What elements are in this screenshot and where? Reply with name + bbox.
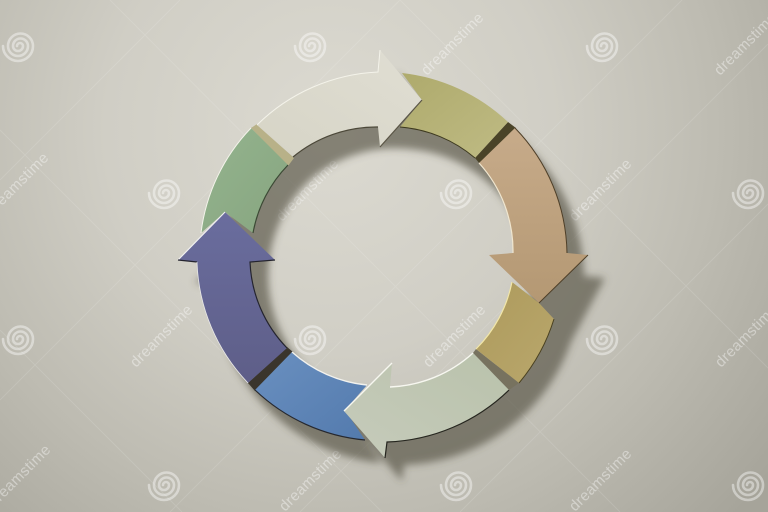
watermark text: dreamstime: [418, 9, 487, 79]
watermark text: dreamstime: [566, 155, 635, 225]
watermark text: dreamstime: [420, 301, 489, 371]
gaps between segments: [248, 122, 519, 391]
watermark text: dreamstime: [273, 155, 342, 225]
cast shadow of the ring: [195, 73, 605, 481]
arrow: purple: [178, 212, 287, 383]
segment: green: [201, 128, 288, 233]
arrow: white: [257, 50, 422, 157]
arrow: tan: [479, 128, 588, 303]
watermark text: dreamstime: [127, 301, 196, 371]
segment: olive: [400, 73, 508, 158]
segment: gold: [476, 282, 554, 383]
arrow: sage: [344, 353, 509, 458]
segment: blue: [255, 352, 367, 440]
